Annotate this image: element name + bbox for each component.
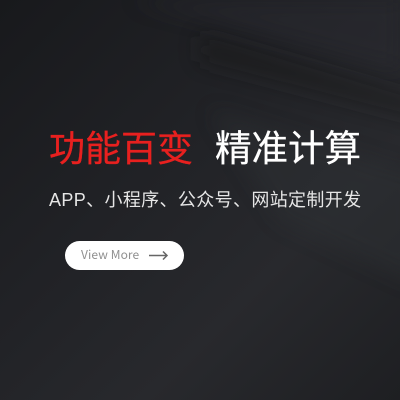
icon: arrow (149, 251, 168, 260)
heading: red part: 功能百变 (49, 128, 193, 169)
button: view more (65, 241, 184, 270)
button label: View More (81, 246, 139, 263)
subtitle: APP、小程序、公众号、网站定制开发 (49, 190, 362, 210)
heading: white part: 精准计算 (215, 128, 361, 169)
